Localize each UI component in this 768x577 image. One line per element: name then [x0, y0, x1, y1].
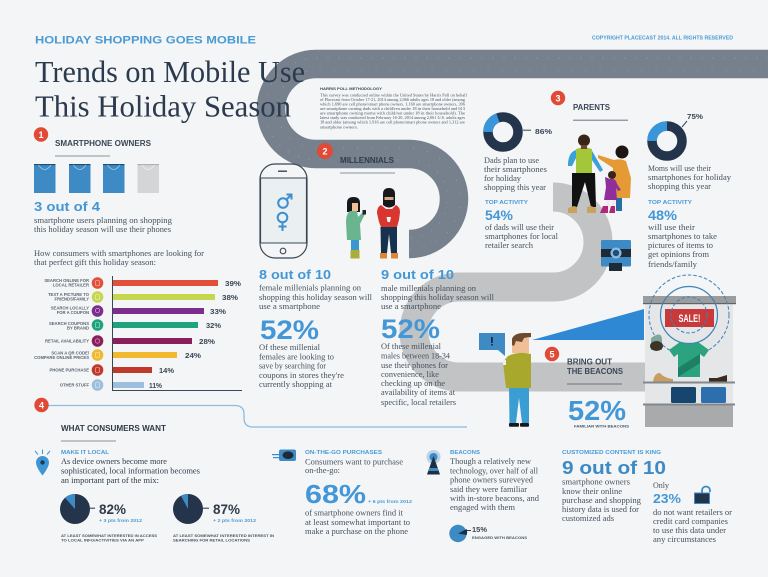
title: This Holiday Season: [35, 88, 291, 124]
bar: text a picture: TEXT A PICTURE TO: [48, 292, 90, 297]
pie chart: 82%: TO LOCAL INFO/ACTIVITIES VIA AN APP: [61, 538, 144, 542]
male millennials text: 9 out of 10: [381, 267, 454, 282]
bar: search locally: 33%: [210, 307, 226, 316]
section 1: smartphone owners: [34, 127, 173, 234]
dads text: smartphones for local: [485, 231, 559, 241]
make it local text: As device owners become more: [61, 456, 167, 466]
make it local text: an important part of the mix:: [61, 475, 159, 485]
light beam: [532, 309, 644, 340]
on-the-go purchases: Consumers want to purchase: [305, 457, 403, 467]
pie chart: 82%: AT LEAST SOMEWHAT INTERESTED IN ACCESS: [61, 533, 157, 538]
harris poll methodology: HARRIS POLL METHODOLOGY: [320, 86, 382, 91]
make it local text: sophisticated, local information becomes: [61, 466, 200, 476]
harris poll methodology: [320, 86, 468, 130]
bar: search online: [44, 277, 241, 289]
bar: search coupons: BY BRAND: [67, 326, 89, 330]
moms text: Moms will use their: [648, 163, 711, 173]
bar: search locally: [51, 305, 226, 317]
dads text: Dads plan to use: [484, 155, 539, 165]
section 5: bring out the beacons: 52%: [568, 395, 626, 426]
moms text: smartphones for holiday: [648, 172, 732, 182]
only 23% text: Only: [653, 480, 670, 490]
bar: other stuff: 11%: [149, 381, 162, 390]
dark road: [265, 58, 768, 250]
bar chart intro text: [34, 248, 204, 267]
section 5: bring out the beacons: THE BEACONS: [567, 367, 624, 376]
bar: text a picture: FRIENDS/FAMILY: [54, 296, 89, 302]
pie chart: 87%: SEARCHING FOR RETAIL LOCATIONS: [173, 538, 250, 542]
illustration: millennial man: [377, 188, 400, 258]
bar: search online: LOCAL RETAILER: [53, 282, 89, 288]
bar chart intro text: How consumers with smartphones are looking for: [34, 248, 204, 258]
on-the-go purchases: 68%: [305, 479, 366, 509]
only 23% text: to use this data under: [653, 525, 726, 535]
moms text: pictures of items to: [648, 240, 713, 250]
beacon rings: [649, 275, 729, 355]
dads text: 54%: [485, 207, 514, 223]
customized content text: know their online: [562, 486, 622, 496]
male millennials text: [381, 267, 495, 407]
icon: location pin: [35, 450, 50, 476]
section 2 heading: millennials: MILLENNIALS: [340, 156, 395, 165]
section 2 heading: millennials: [317, 143, 395, 174]
section 5: bring out the beacons: FAMILIAR WITH BEACONS: [574, 424, 629, 428]
male millennials text: Of these millenial: [381, 341, 442, 351]
green t-shirt: [669, 342, 709, 377]
donut chart: moms 75%: 75%: [687, 112, 703, 121]
light road: [414, 197, 645, 377]
make it local text: [61, 450, 200, 485]
male millennials text: male millenials planning on: [381, 283, 477, 293]
harris poll methodology: latest study was conducted from February 16-20, 2014 among 2,061 U.S. adults ages: [320, 116, 466, 121]
harris poll methodology: are smartphone owning moms with child/ren under 18 in their household). The: [320, 112, 465, 116]
customized content text: history data is used for: [562, 504, 639, 514]
section 2 heading: millennials: 2: [322, 146, 328, 156]
beacons text: said they were familiar: [450, 484, 527, 494]
pie chart: 15% beacons: 15%: [472, 525, 487, 534]
sale sign: [665, 309, 714, 327]
section 1: smartphone owners: smartphone users planning on shopping: [34, 215, 173, 225]
icon: beacon tower: [426, 450, 440, 474]
bar: search coupons: SEARCH COUPONS: [49, 321, 89, 326]
dads text: for holiday: [484, 173, 522, 183]
bar: other stuff: [60, 379, 162, 391]
bar: search coupons: [49, 319, 221, 331]
bar: search locally: FOR A COUPON: [57, 310, 89, 315]
male millennials text: males between 18-34: [381, 350, 451, 360]
customized content text: purchase and shopping: [562, 495, 642, 505]
bar: scan a qr code: [34, 349, 201, 361]
section 3 heading: parents: PARENTS: [573, 103, 611, 112]
bar: scan a qr code: 24%: [185, 351, 201, 360]
pie chart: 87%: AT LEAST SOMEWHAT INTERESTED INTEREST IN: [173, 533, 274, 538]
beacons text: engaged with them: [450, 502, 515, 512]
pie chart: 87%: 87%: [213, 501, 241, 517]
customized content text: smartphone owners: [562, 476, 630, 486]
female millennials text: females are looking to: [259, 352, 334, 362]
female millennials text: [259, 267, 373, 389]
copyright: COPYRIGHT PLACECAST 2014. ALL RIGHTS RESERVED: [592, 36, 733, 42]
section 4 connector line: [34, 398, 467, 427]
dads text: of dads will use their: [485, 222, 554, 232]
what consumers want heading: [61, 424, 166, 442]
bar: phone purchase: [49, 364, 174, 376]
only 23% text: credit card companies: [653, 516, 728, 526]
title: [35, 54, 305, 124]
on-the-go purchases: + 6 pts from 2012: [368, 499, 413, 504]
harris poll methodology: are smartphone owning dads with a child/ren under 18 in their household and 613: [320, 107, 465, 111]
harris poll methodology: smartphone owners.: [320, 126, 358, 130]
donut chart: dads 86%: [488, 117, 552, 147]
pie chart: 82%: 82%: [99, 501, 127, 517]
female millennials text: coupons in stores they're: [259, 370, 344, 380]
bar: search online: 39%: [225, 279, 241, 288]
female millennials text: 8 out of 10: [259, 267, 331, 282]
icon: instant camera: [601, 240, 631, 271]
on-the-go purchases: at least somewhat important to: [305, 517, 410, 527]
bar: text a picture: 38%: [222, 293, 238, 302]
pie chart: 15% beacons: ENGAGED WITH BEACONS: [472, 535, 527, 540]
bar: scan a qr code: COMPARE ONLINE PRICES: [34, 355, 89, 360]
male millennials text: checking up on the: [381, 378, 445, 388]
bar: phone purchase: 14%: [159, 366, 174, 375]
bar: search locally: SEARCH LOCALLY: [51, 306, 89, 310]
section 5: bring out the beacons: BRING OUT: [567, 358, 612, 367]
beacons text: phone owners sureveyed: [450, 474, 534, 484]
dads text: shopping this year: [484, 182, 546, 192]
beacons text: with in-store beacons, and: [450, 493, 540, 503]
pie chart: 82%: + 3 pts from 2012: [99, 518, 143, 523]
harris poll methodology: of Placecast from October 17-21, 2014 among 2,066 adults ages 18 and older (among: [320, 98, 465, 103]
title: Trends on Mobile Use: [35, 54, 305, 89]
harris poll methodology: 18 and older (among which 1,916 are cell phone/smart phone owners and 1,312 are: [320, 120, 465, 126]
moms text: [648, 163, 732, 269]
illustration: family: [568, 134, 631, 213]
on-the-go purchases: make a purchase on the phone: [305, 526, 408, 536]
harris poll methodology: which 1,690 are cell phone/smart phone owners, 1,160 are smartphone owners, 396: [320, 102, 465, 108]
dads text: their smartphones: [484, 164, 547, 174]
illustration: man with phone: [503, 333, 531, 427]
bar chart intro text: that perfect gift this holiday season:: [34, 257, 156, 267]
make it local text: MAKE IT LOCAL: [61, 450, 110, 456]
female millennials text: female millenials planning on: [259, 283, 362, 293]
dads text: TOP ACTIVITY: [485, 200, 528, 206]
bar: retail availability: 28%: [199, 337, 215, 346]
customized content text: customized ads: [562, 513, 614, 523]
section 3 heading: parents: 3: [555, 93, 561, 103]
female millennials text: shopping this holiday season will: [259, 292, 373, 302]
female millennials text: use a smartphone: [259, 301, 320, 311]
section 1: smartphone owners: 3 out of 4: [34, 199, 101, 214]
beacons text: Though a relatively new: [450, 456, 532, 466]
on-the-go purchases: ON-THE-GO PURCHASES: [305, 450, 382, 456]
beacons text: [450, 450, 540, 512]
illustration: shop with beacon: [643, 275, 736, 427]
moms text: smartphones to take: [648, 231, 717, 241]
pie chart: 87%: + 2 pts from 2012: [213, 518, 257, 523]
section 1: smartphone owners: this holiday season will use their phones: [34, 224, 171, 234]
male millennials text: use their phones for: [381, 360, 448, 370]
moms text: shopping this year: [648, 181, 711, 191]
bar: search coupons: 32%: [206, 321, 221, 330]
only 23% text: do not want retailers or: [653, 507, 732, 517]
icon: mobile phone purchase: [272, 450, 296, 461]
customized content text: 9 out of 10: [562, 458, 666, 478]
only 23% text: 23%: [653, 492, 681, 506]
bar chart: [34, 276, 242, 391]
bar: text a picture: [48, 291, 238, 303]
dads text: [484, 155, 559, 250]
moms text: will use their: [648, 222, 695, 232]
customized content text: [562, 450, 666, 523]
hanging hat: [650, 334, 663, 351]
donut chart: moms 75%: [652, 112, 703, 156]
speech bubble: [479, 333, 505, 356]
illustration: millennial woman: [346, 197, 366, 258]
bar: phone purchase: PHONE PURCHASE: [49, 368, 89, 372]
female millennials text: 52%: [260, 315, 319, 345]
female millennials text: currently shopping at: [259, 379, 333, 389]
moms text: friends/family: [648, 259, 698, 269]
bar: retail availability: [45, 335, 215, 347]
donut chart: dads 86%: 86%: [535, 127, 552, 136]
male millennials text: 52%: [381, 314, 440, 344]
bar: other stuff: OTHER STUFF: [60, 382, 89, 388]
shoes on shelf: [653, 373, 727, 382]
sale sign: SALE!: [678, 313, 700, 325]
what consumers want heading: WHAT CONSUMERS WANT: [61, 424, 166, 433]
on-the-go purchases: on-the-go:: [305, 465, 340, 475]
icon: shopping bags 3 of 4: [34, 164, 159, 193]
male millennials text: specific, local retailers: [381, 397, 456, 407]
icon: phone with gender symbols: [260, 164, 307, 258]
folded jeans: [671, 387, 726, 403]
moms text: 48%: [648, 207, 678, 223]
pie chart: 87%: [173, 494, 274, 542]
section 1: smartphone owners: 1: [38, 130, 44, 140]
female millennials text: Of these millenial: [259, 342, 321, 352]
section 1: smartphone owners: SMARTPHONE OWNERS: [55, 139, 152, 148]
female millennials text: save by searching for: [259, 360, 326, 370]
kicker heading: HOLIDAY SHOPPING GOES MOBILE: [35, 34, 256, 46]
bar: retail availability: RETAIL AVAILABILITY: [45, 338, 89, 344]
section 3 heading: parents: [551, 91, 628, 121]
section 5: bring out the beacons: [545, 347, 629, 428]
dads text: retailer search: [485, 240, 534, 250]
beacons text: technology, over half of all: [450, 466, 539, 476]
male millennials text: use a smartphone: [381, 301, 441, 311]
section 5: bring out the beacons: 5: [549, 349, 555, 359]
bar: search online: SEARCH ONLINE FOR: [44, 278, 89, 283]
pie chart: 82%: [60, 494, 157, 542]
moms text: TOP ACTIVITY: [648, 200, 692, 206]
moms text: get opinions from: [648, 249, 709, 259]
customized content text: CUSTOMIZED CONTENT IS KING: [562, 450, 661, 456]
beacons text: BEACONS: [450, 450, 480, 456]
only 23% text: [653, 480, 732, 544]
icon: open lock: [694, 486, 710, 504]
harris poll methodology: This survey was conducted online within the United States by Harris Poll on behalf: [320, 94, 468, 98]
male millennials text: convenience, like: [381, 369, 439, 379]
section 4 connector line: 4: [39, 400, 44, 410]
on-the-go purchases: of smartphone owners find it: [305, 508, 404, 518]
male millennials text: shopping this holiday season will: [381, 292, 495, 302]
bar: scan a qr code: SCAN A QR CODE/: [51, 350, 90, 356]
pie chart: 15% beacons: [449, 525, 527, 542]
on-the-go purchases: [305, 450, 413, 536]
only 23% text: any circumstances: [653, 534, 716, 544]
male millennials text: availability of items at: [381, 387, 456, 397]
